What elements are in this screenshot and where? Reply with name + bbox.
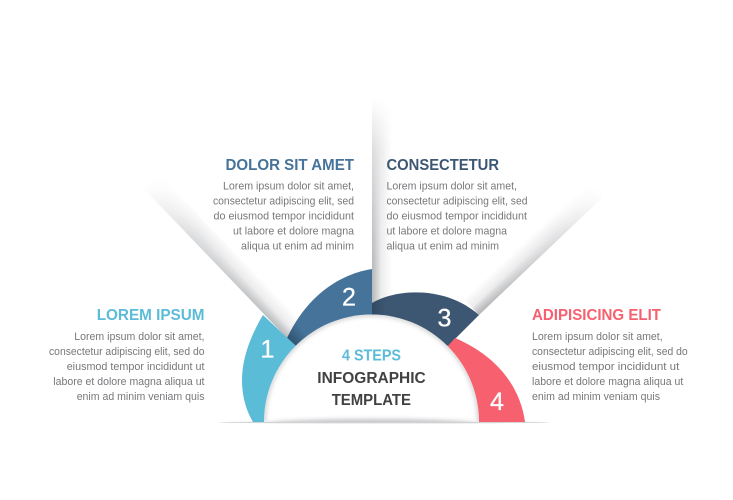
text block: dolor sit amet: aliqua ut enim ad minim (241, 240, 354, 252)
text block: adipisicing elit: consectetur adipiscing elit, sed do (532, 346, 688, 358)
text block: consectetur: ut labore et dolore magna (386, 226, 507, 238)
segment 4 (448, 338, 525, 422)
text block: consectetur: CONSECTETUR (386, 157, 499, 174)
center text (317, 348, 426, 409)
fold shadow: step 2 (372, 110, 388, 303)
text block: lorem ipsum: Lorem ipsum dolor sit amet, (74, 331, 204, 343)
text block: lorem ipsum (49, 307, 205, 403)
fold shadow: step 3 (468, 205, 594, 315)
center text: TEMPLATE (332, 392, 411, 409)
number 1: 1 (261, 336, 274, 364)
segment 2 (287, 269, 372, 346)
text block: lorem ipsum: consectetur adipiscing elit, sed do (49, 346, 204, 358)
text block: adipisicing elit: labore et dolore magna aliqua ut (532, 376, 683, 388)
text block: consectetur: do eiusmod tempor incididunt (386, 210, 527, 222)
text block: consectetur: consectetur adipiscing elit, sed (386, 196, 528, 208)
text block: dolor sit amet: ut labore et dolore magna (233, 226, 354, 238)
text block: adipisicing elit: Lorem ipsum dolor sit amet, (532, 331, 663, 343)
semicircle inner shading (264, 314, 479, 429)
text block: adipisicing elit: eiusmod tempor incididunt ut (532, 361, 679, 373)
number 2: 2 (342, 284, 356, 312)
text block: dolor sit amet (213, 157, 354, 252)
text block: lorem ipsum: enim ad minim veniam quis (77, 391, 205, 403)
fold shadow: step 1 (154, 198, 296, 338)
text block: lorem ipsum: labore et dolore magna aliqua ut (53, 376, 204, 388)
number 4: 4 (490, 388, 504, 416)
text block: consectetur: aliqua ut enim ad minim (386, 240, 499, 252)
segment 3 (372, 292, 479, 346)
base shadow line (218, 421, 550, 423)
text block: dolor sit amet: Lorem ipsum dolor sit amet, (223, 180, 354, 192)
center text: INFOGRAPHIC (317, 370, 426, 387)
text block: dolor sit amet: DOLOR SIT AMET (226, 157, 354, 174)
segment 1 (242, 315, 296, 422)
text block: consectetur: Lorem ipsum dolor sit amet, (386, 180, 517, 192)
text block: dolor sit amet: consectetur adipiscing elit, sed (213, 196, 354, 208)
number 3: 3 (438, 304, 451, 332)
text block: consectetur (386, 157, 528, 252)
text block: dolor sit amet: do eiusmod tempor incididunt (214, 210, 354, 222)
text block: lorem ipsum: eiusmod tempor incididunt ut (67, 361, 204, 373)
inner white semicircle (264, 314, 479, 422)
text block: adipisicing elit (532, 307, 688, 403)
center text: 4 STEPS (342, 348, 401, 364)
text block: adipisicing elit: enim ad minim veniam quis (532, 391, 661, 403)
infographic (49, 110, 688, 424)
text block: adipisicing elit: ADIPISICING ELIT (532, 307, 661, 324)
text block: lorem ipsum: LOREM IPSUM (97, 307, 204, 324)
